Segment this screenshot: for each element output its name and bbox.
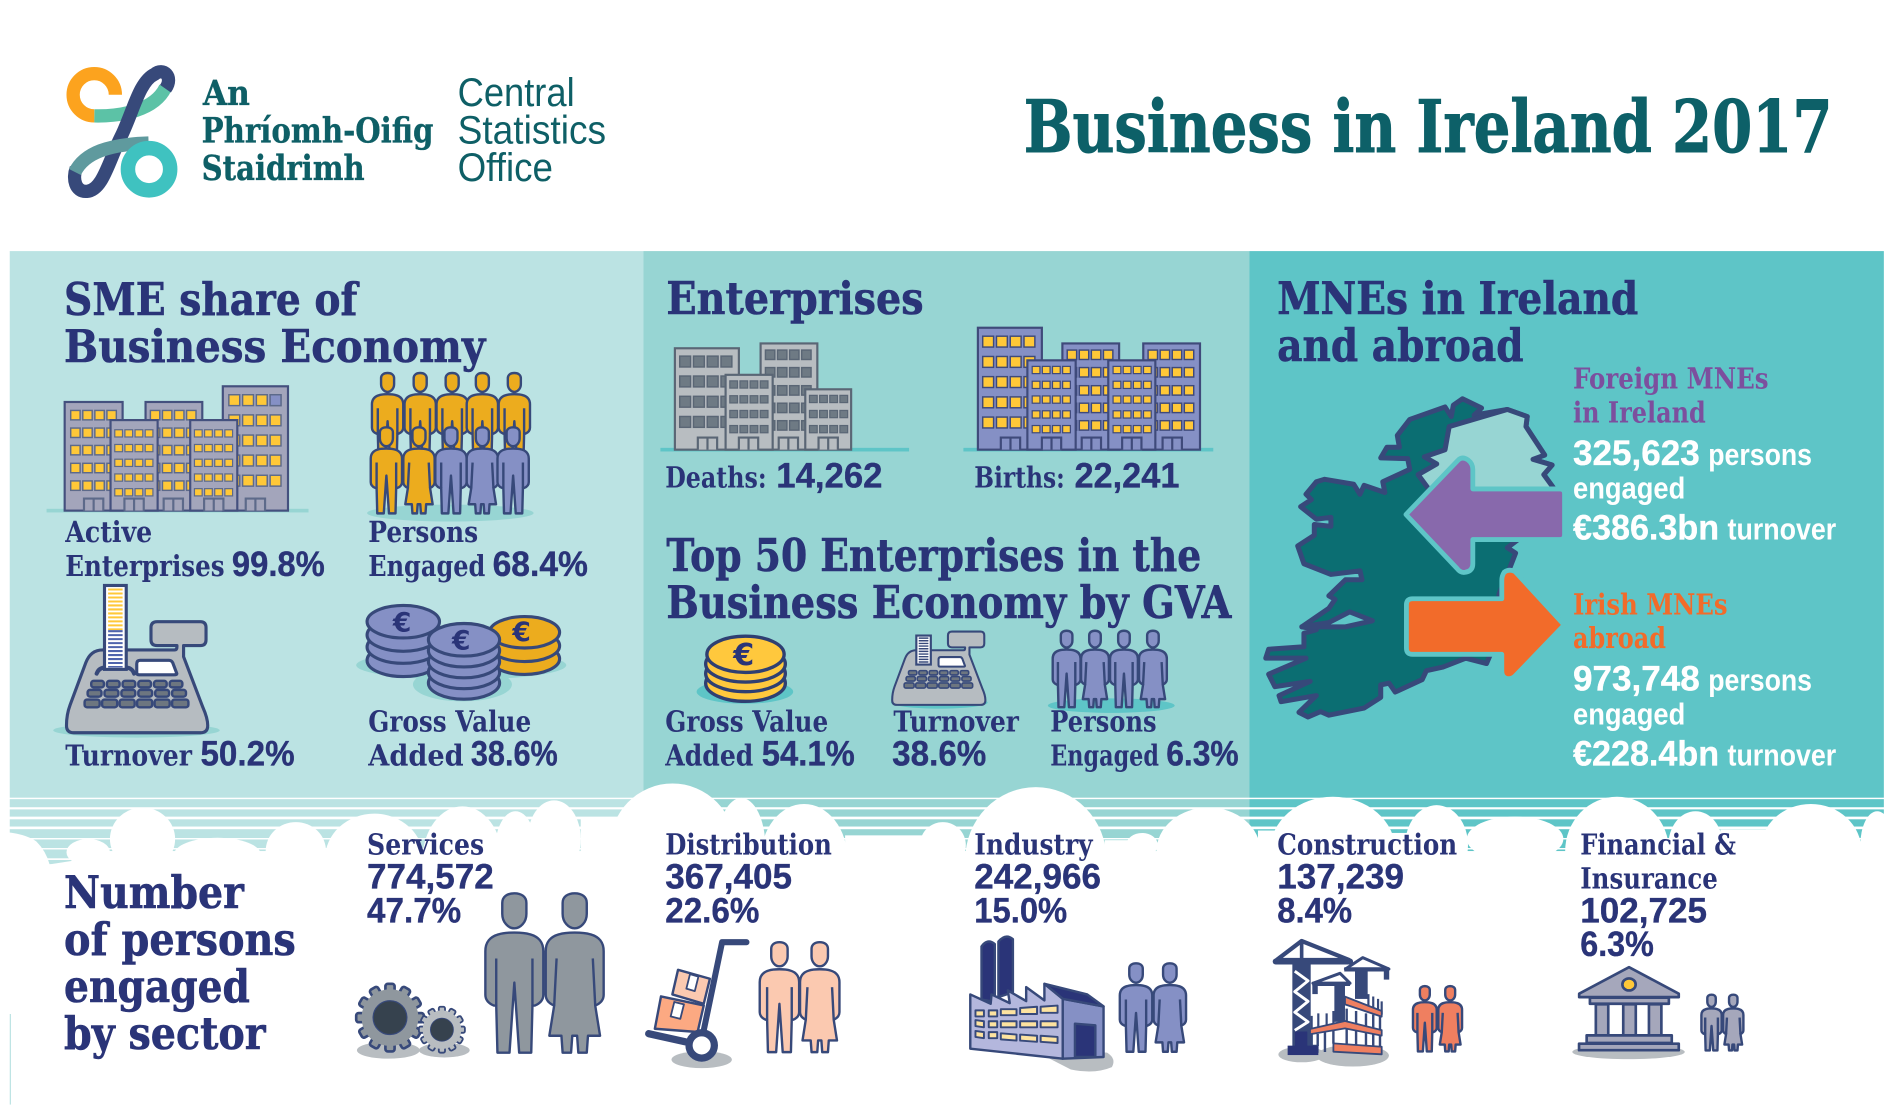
icon: euro coins: € (392, 607, 411, 638)
icon: bank (1572, 967, 1685, 1059)
Irish MNEs text: Irish MNEs (1573, 587, 1728, 621)
distribution figures: 22.6% (665, 891, 759, 930)
industry figures: 15.0% (974, 891, 1067, 930)
logo English name: Office (458, 146, 553, 190)
map of Ireland (1266, 399, 1559, 717)
construction figures: Construction (1277, 828, 1457, 862)
heading (1277, 272, 1638, 372)
label: gross value added (367, 705, 558, 773)
heading (64, 273, 487, 373)
industry figures: 242,966 (974, 857, 1101, 896)
icon: people (1701, 995, 1743, 1050)
foreign MNEs text: Foreign MNEs (1573, 362, 1769, 396)
label: active enterprises: Active (64, 515, 152, 549)
industry figures (974, 828, 1101, 930)
construction figures: 137,239 (1277, 857, 1404, 896)
construction figures (1277, 828, 1457, 930)
heading: Top 50 Enterprises: Top 50 Enterprises in the (666, 529, 1201, 582)
Irish MNEs text: €228.4bn (1573, 734, 1719, 773)
icon: gold coins (697, 636, 793, 704)
foreign MNEs text: engaged (1573, 473, 1685, 506)
heading: SME share of (64, 273, 360, 326)
heading: and abroad (1277, 319, 1524, 372)
arrow: purple inward (1406, 458, 1565, 572)
label: deaths: 14,262 (776, 457, 883, 496)
label: persons engaged: 6.3% (1166, 734, 1239, 773)
logo Irish name: Staidrimh (202, 148, 365, 189)
heading (64, 866, 296, 1060)
foreign MNEs text: in Ireland (1573, 396, 1706, 430)
logo Irish name (202, 73, 433, 189)
Irish MNEs text: engaged (1573, 698, 1685, 731)
icon: hand truck (649, 942, 746, 1068)
label: deaths (665, 457, 883, 496)
icon: blue buildings births (963, 328, 1213, 451)
panel: SME share of Business Economy (47, 273, 588, 773)
panel: SME background (10, 251, 644, 864)
clouds (0, 783, 1893, 1113)
label: deaths: Deaths: (665, 461, 767, 495)
label: turnover: 50.2% (200, 734, 295, 773)
distribution figures: Distribution (665, 828, 832, 862)
panel: MNEs background (1249, 251, 1884, 864)
icon: cash register (53, 585, 220, 738)
panel: MNEs in Ireland and abroad (1266, 272, 1836, 773)
logo English name: Statistics (458, 109, 606, 153)
label: births: Births: (974, 461, 1065, 495)
label: persons engaged (368, 515, 588, 584)
distribution figures (665, 828, 832, 930)
construction figures: 8.4% (1277, 891, 1352, 930)
label: gross value added: 38.6% (471, 734, 558, 773)
icon: people (760, 942, 839, 1052)
logo English name: Central (458, 71, 575, 115)
heading: Top 50 Enterprises (666, 529, 1233, 629)
heading: Enterprises (666, 272, 924, 325)
icon: people (485, 893, 604, 1053)
heading: by sector (64, 1007, 266, 1060)
heading: of persons (64, 913, 296, 966)
label: gross value added: 54.1% (762, 734, 855, 773)
arrow: orange outward (1406, 570, 1564, 679)
heading: engaged (64, 960, 250, 1013)
heading: MNEs in Ireland (1277, 272, 1638, 325)
panel: number of persons engaged by sector (64, 828, 1743, 1071)
label: turnover: Turnover (893, 705, 1020, 739)
financial figures: 6.3% (1580, 925, 1654, 964)
label: persons engaged: 68.4% (493, 545, 588, 584)
label: persons engaged: Engaged (368, 549, 485, 583)
icon: gold coins: € (732, 638, 754, 673)
label: turnover (892, 705, 1020, 773)
icon: factory (970, 937, 1113, 1071)
label: gross value added: Gross Value (368, 705, 531, 739)
icon: euro coins: € (451, 625, 470, 656)
label: turnover: 38.6% (892, 734, 986, 773)
industry figures: Industry (974, 828, 1094, 862)
financial figures (1580, 828, 1736, 964)
Irish MNEs text: turnover (1728, 739, 1836, 772)
icon: four people (1048, 631, 1175, 713)
financial figures: 102,725 (1580, 891, 1707, 930)
icon: ten people (367, 373, 534, 521)
heading: Business Economy (64, 320, 487, 373)
foreign MNEs text: turnover (1728, 514, 1836, 547)
panel: Enterprises (660, 272, 1239, 773)
label: active enterprises (64, 515, 325, 584)
foreign MNEs text: €386.3bn (1573, 509, 1719, 548)
sector: financial and insurance (1572, 828, 1743, 1059)
label: births: 22,241 (1074, 457, 1179, 496)
logo English name (458, 71, 606, 190)
label: gross value added: Gross Value (665, 705, 828, 739)
logo symbol (73, 72, 170, 191)
icon: people (1120, 963, 1186, 1052)
foreign MNEs text (1573, 362, 1836, 548)
label: turnover: Turnover (65, 738, 193, 772)
services figures: 47.7% (367, 891, 461, 930)
sector: distribution (649, 828, 839, 1068)
services figures (367, 828, 494, 930)
icon: cranes and building (1276, 941, 1389, 1067)
services figures: 774,572 (367, 857, 494, 896)
Irish MNEs text: 973,748 (1573, 659, 1700, 698)
sector: industry (970, 828, 1186, 1071)
icon: buildings (47, 386, 309, 512)
financial figures: Financial & (1580, 828, 1736, 862)
panel: enterprises background (644, 251, 1249, 864)
logo Irish name: An (202, 73, 250, 114)
heading: Top 50 Enterprises: Business Economy by GVA (666, 576, 1233, 629)
icon: grey buildings deaths (660, 343, 909, 451)
label: gross value added (664, 705, 855, 773)
icon: euro coins: € (511, 617, 531, 648)
sector: construction (1276, 828, 1462, 1067)
icon: small cash register (891, 632, 988, 709)
Irish MNEs text: persons (1708, 664, 1812, 697)
label: persons engaged (1050, 705, 1239, 773)
logo (73, 71, 606, 191)
label: births (974, 457, 1179, 496)
label: active enterprises: Enterprises (65, 549, 225, 583)
label: persons engaged: Persons (1050, 705, 1157, 739)
icon: euro coins (356, 605, 566, 701)
icon: people (1413, 986, 1462, 1051)
Irish MNEs text: abroad (1573, 621, 1666, 655)
foreign MNEs text: 325,623 (1573, 434, 1700, 473)
heading: Number (64, 866, 244, 919)
label: gross value added: Added (367, 738, 464, 772)
label: active enterprises: 99.8% (232, 545, 325, 584)
services figures: Services (367, 828, 484, 862)
label: gross value added: Added (664, 738, 753, 772)
icon: gears (356, 984, 470, 1059)
label: persons engaged: Persons (368, 515, 478, 549)
foreign MNEs text: persons (1708, 439, 1812, 472)
label: turnover (65, 734, 295, 773)
distribution figures: 367,405 (665, 857, 792, 896)
logo Irish name: Phríomh-Oifig (202, 110, 433, 151)
financial figures: Insurance (1580, 861, 1718, 895)
label: persons engaged: Engaged (1050, 738, 1159, 772)
Irish MNEs text (1573, 587, 1836, 773)
sector: services (356, 828, 604, 1059)
